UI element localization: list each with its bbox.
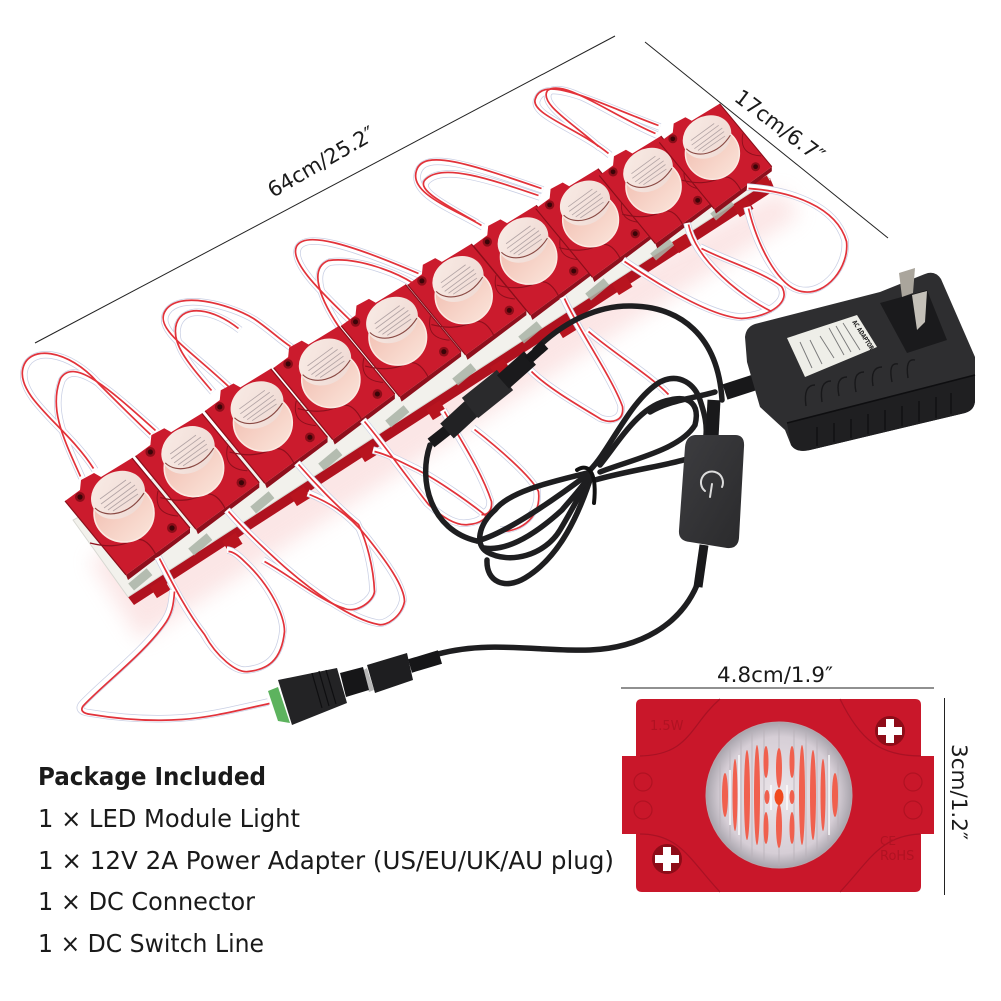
screw top right <box>875 716 905 746</box>
wires in front of strip <box>80 187 847 720</box>
list item: 1 × 12V 2A Power Adapter (US/EU/UK/AU plug) <box>38 846 614 875</box>
screw bottom left <box>652 844 682 874</box>
detail module: RoHS <box>880 849 914 864</box>
dimension: length <box>35 36 615 343</box>
dimension: width: 17cm/6.7″ <box>730 85 829 168</box>
embossed marks <box>634 773 922 819</box>
list item: 1 × LED Module Light <box>38 804 300 833</box>
icon: power symbol <box>701 471 723 497</box>
wire loops behind modules <box>22 88 660 478</box>
touch switch box <box>679 400 744 587</box>
adapter body <box>745 273 975 451</box>
LED module 8 <box>536 169 652 282</box>
cable: switch to DC plug <box>438 585 697 654</box>
list item: 1 × DC Connector <box>38 887 256 916</box>
soft shadow under strip <box>90 190 800 640</box>
LED module 5 <box>341 284 461 402</box>
LED module 7 <box>473 205 591 320</box>
LED module 6 <box>408 244 526 360</box>
LED module 2 <box>136 413 259 534</box>
LED module 10 <box>659 104 772 214</box>
LED module 3 <box>205 369 328 488</box>
cable tie <box>577 468 595 503</box>
LED module 1 <box>65 458 190 580</box>
female DC connector <box>431 345 545 443</box>
LED module 9 <box>599 136 714 248</box>
US plug <box>880 290 947 353</box>
dimension: module height: 3cm/1.2″ <box>947 744 971 840</box>
detail module <box>622 699 934 892</box>
list item: 1 × DC Switch Line <box>38 929 264 958</box>
LED modules row <box>65 104 772 580</box>
strain relief bottom <box>698 545 704 587</box>
adapter label: AC ADAPTOR <box>850 319 876 352</box>
LED module 4 <box>274 326 395 444</box>
coiled cable bundle <box>426 378 715 584</box>
power adapter <box>725 268 975 451</box>
strain relief top <box>712 400 714 438</box>
strain relief <box>725 380 762 392</box>
package list <box>38 762 614 958</box>
male DC plug and green terminal <box>268 653 440 725</box>
dimension: module width: 4.8cm/1.9″ <box>717 663 833 687</box>
adapter label <box>787 315 877 377</box>
cable: plug over strip to adapter junction <box>535 306 722 400</box>
dimension: width <box>645 42 888 238</box>
lens <box>706 722 852 868</box>
detail module: CE <box>880 834 896 848</box>
list heading: Package Included <box>38 762 266 791</box>
mounting strip with adhesive tape <box>73 165 775 605</box>
black cables <box>426 306 722 654</box>
dimension: length: 64cm/25.2″ <box>264 121 380 202</box>
detail module: 1.5W <box>650 719 684 734</box>
